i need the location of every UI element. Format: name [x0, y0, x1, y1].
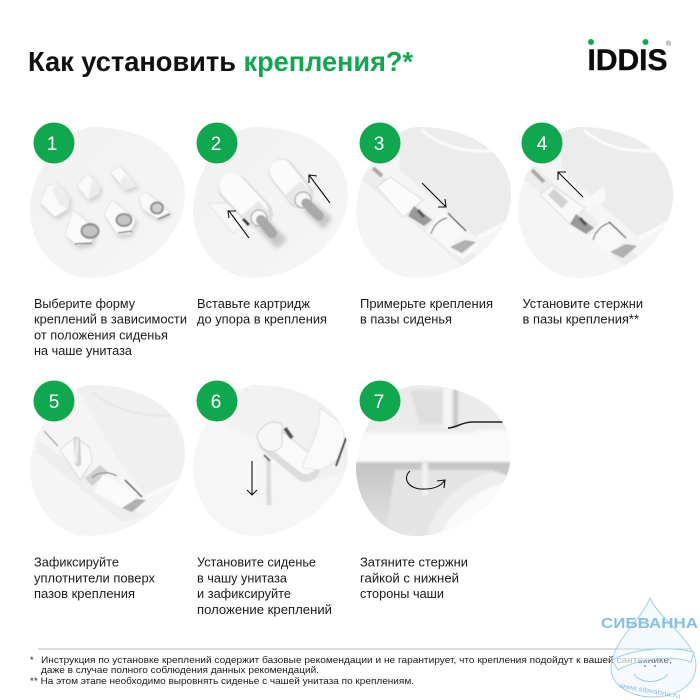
caption 3 — [360, 297, 493, 326]
photo: rods installed in mount slots — [518, 120, 682, 278]
footnotes: Инструкция по установке креплений содержит базовые рекомендации и не гарантирует, что крепления подойдут к вашей сантехнике, — [41, 654, 672, 665]
caption 3: Примерьте крепления — [360, 297, 493, 311]
step 7 — [350, 380, 520, 601]
caption 7 — [360, 556, 468, 601]
badge 1: 1 — [47, 134, 57, 155]
title: Как установить — [28, 46, 236, 77]
caption 6: и зафиксируйте — [197, 587, 291, 601]
logo: IDDIS: IDDIS — [588, 44, 668, 77]
photo: mount fitted into seat slots — [356, 120, 520, 278]
photo: seals fixed over mount slots — [30, 385, 190, 536]
arrow: left cartridge — [228, 211, 249, 238]
footnotes — [30, 654, 672, 686]
caption 6: в чашу унитаза — [197, 572, 287, 586]
logo: IDDIS: ® — [666, 40, 672, 48]
step 5 — [30, 380, 190, 601]
arrow: right cartridge — [309, 175, 330, 203]
caption 7: стороны чаши — [360, 587, 444, 601]
caption 1: креплений в зависимости — [34, 312, 187, 326]
step 1 — [30, 122, 187, 358]
caption 2 — [197, 297, 327, 326]
step 6 — [193, 380, 350, 617]
watermark: Сибванна: www.sibvanna.ru — [617, 682, 681, 700]
title: крепления?* — [244, 46, 413, 77]
badge 4: 4 — [537, 134, 548, 155]
watermark: Сибванна — [601, 598, 699, 700]
caption 4: Установите стержни — [522, 297, 643, 311]
arrow: insert rod — [558, 172, 583, 197]
caption 5 — [34, 556, 156, 601]
badge 5: 5 — [49, 392, 59, 413]
badge 3: 3 — [374, 134, 384, 155]
badge 5 — [34, 380, 74, 422]
badge 2 — [196, 122, 238, 164]
caption 1: от положения сиденья — [34, 328, 168, 342]
caption 2: до упора в крепления — [197, 312, 327, 326]
caption 1: на чаше унитаза — [34, 344, 132, 358]
step 2 — [193, 122, 348, 326]
footnotes: даже в случае полного соблюдения данных рекомендаций. — [41, 664, 319, 675]
arrow: rotate nut — [406, 471, 445, 489]
caption 5: уплотнители поверх — [34, 572, 156, 586]
caption 7: Затяните стержни — [360, 556, 468, 570]
badge 3 — [360, 122, 400, 164]
step 3 — [356, 120, 520, 326]
badge 2: 2 — [211, 134, 221, 155]
caption 4 — [522, 297, 643, 326]
title — [28, 46, 413, 77]
badge 6: 6 — [211, 392, 221, 413]
caption 5: пазов крепления — [34, 587, 135, 601]
arrow: push mount — [422, 183, 446, 207]
caption 2: Вставьте картридж — [197, 297, 311, 311]
caption 4: в пазы крепления** — [522, 312, 639, 326]
watermark: Сибванна: СИБВАННА — [601, 616, 699, 632]
arrow: lower seat — [247, 461, 257, 495]
photo: seat installed on toilet bowl — [193, 385, 350, 536]
badge 7: 7 — [374, 392, 384, 413]
caption 6: Установите сиденье — [197, 556, 316, 570]
photo: cartridges inserted in mounts — [193, 127, 348, 278]
footnotes: * — [30, 654, 34, 665]
caption 6: положение креплений — [197, 603, 332, 617]
badge 4 — [522, 122, 562, 164]
caption 1: Выберите форму — [34, 297, 136, 311]
photo: six plastic mounts — [30, 127, 185, 278]
photo: nut tightened under the bowl — [356, 385, 510, 536]
badge 6 — [196, 380, 238, 422]
caption 3: в пазы сиденья — [360, 312, 452, 326]
caption 5: Зафиксируйте — [34, 556, 119, 570]
step 4 — [518, 120, 682, 326]
badge 1 — [34, 122, 74, 164]
footnotes: ** На этом этапе необходимо выровнять сиденье с чашей унитаза по креплениям. — [30, 675, 414, 686]
caption 7: гайкой с нижней — [360, 572, 459, 586]
caption 6 — [197, 556, 332, 617]
badge 7 — [360, 380, 400, 422]
caption 1 — [34, 297, 187, 358]
